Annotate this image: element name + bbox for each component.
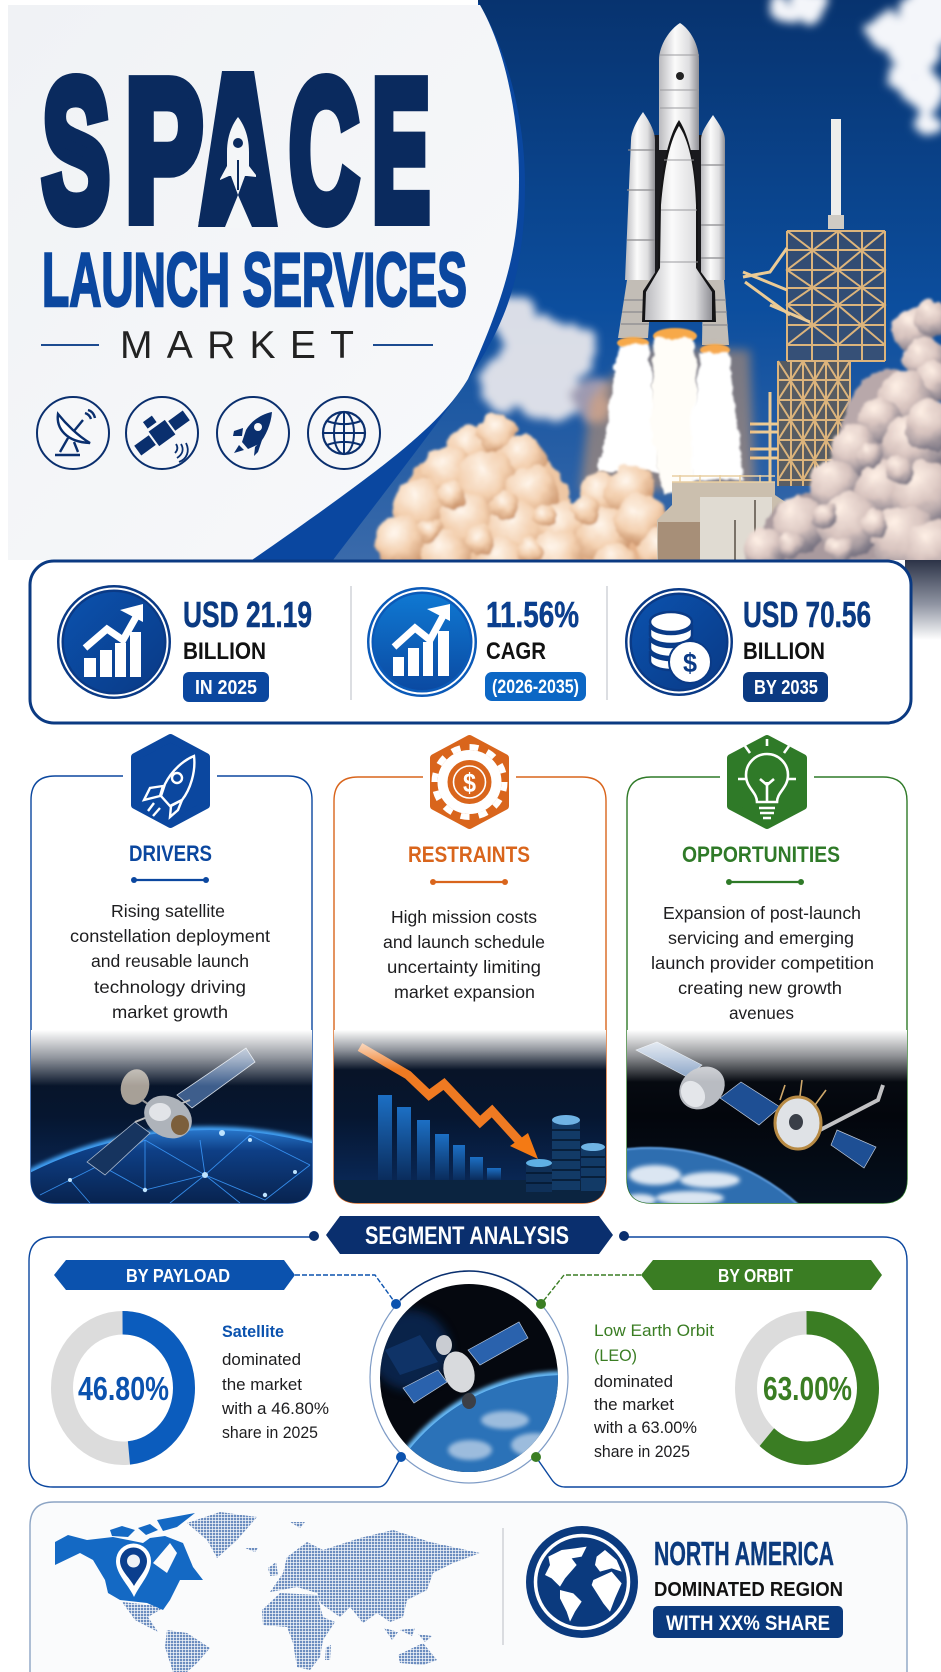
left booster [625, 112, 655, 280]
orbit text: Low Earth Orbit [594, 1321, 714, 1340]
clouds behind rocket [479, 294, 610, 422]
title word SPACE: P [125, 40, 203, 262]
icon: coins [625, 588, 733, 696]
divider rule [430, 879, 508, 885]
region headline: NORTH AMERICA [654, 1535, 834, 1572]
description text: and reusable launch [91, 951, 249, 971]
panel: regional analysis [30, 1502, 907, 1672]
by payload banner [54, 1260, 295, 1290]
icon: rocket [217, 397, 289, 469]
orbit text [593, 1321, 714, 1461]
satellite two [775, 1080, 883, 1168]
image: servicing satellites [627, 1030, 907, 1203]
description text: market growth [112, 1002, 228, 1022]
KPI: USD 70.56 billion by 2035 [625, 588, 871, 702]
description text: market expansion [394, 982, 535, 1002]
description text: Expansion of post-launch [663, 903, 861, 923]
description text [383, 907, 545, 1002]
icon: location pin [116, 1544, 151, 1597]
title word SPACE: A [199, 40, 277, 262]
icon: growth chart blue [367, 587, 477, 697]
panel: opportunities [626, 735, 908, 1204]
donut chart: orbit 63.00% [746, 1323, 868, 1453]
KPI: 11.56% CAGR 2026-2035 [367, 587, 586, 701]
launch smoke right [743, 300, 941, 580]
title word SPACE [42, 40, 430, 262]
launch tower [743, 119, 885, 490]
dotted continents [122, 1512, 480, 1672]
description text: constellation deployment [70, 926, 270, 946]
payload text: the market [222, 1375, 302, 1394]
description text: technology driving [94, 977, 246, 997]
satellite [87, 1048, 255, 1175]
description text [70, 901, 270, 1022]
hero photo: rocket launch [334, 0, 941, 560]
icon: growth chart [57, 585, 171, 699]
share pill [653, 1606, 843, 1638]
coin stacks [526, 1115, 605, 1192]
booster nozzles [618, 280, 652, 338]
payload text: with a 46.80% [221, 1399, 329, 1418]
icon: globe badge [526, 1526, 638, 1638]
MARKET label with rules: MARKET [120, 324, 354, 367]
KPI: USD 21.19 billion in 2025 [57, 585, 312, 702]
satellite one [636, 1042, 780, 1125]
description text: servicing and emerging [668, 928, 854, 948]
share pill: WITH XX% SHARE [666, 1612, 830, 1635]
image: falling chart and coins [334, 1030, 606, 1203]
white title area [8, 5, 519, 560]
rocket cut-out in A [198, 71, 278, 228]
description text: uncertainty limiting [387, 957, 541, 977]
core upper [659, 23, 699, 150]
region subheading: DOMINATED REGION [654, 1579, 843, 1601]
satellite [385, 1322, 528, 1409]
KPI: 11.56% CAGR 2026-2035: CAGR [486, 638, 546, 665]
icon: coins: $ [683, 648, 697, 678]
icon: gear dollar hexagon: $ [463, 768, 476, 798]
panel outline [29, 1237, 907, 1487]
donut chart: payload 46.80% [62, 1323, 184, 1453]
icon: lightbulb hexagon [731, 739, 803, 825]
icon: globe [308, 397, 380, 469]
payload text: dominated [222, 1350, 301, 1369]
orbit text: the market [594, 1395, 674, 1414]
KPI: USD 21.19 billion in 2025: IN 2025 [195, 677, 257, 699]
description text [651, 903, 874, 1023]
KPI: USD 70.56 billion by 2035: BILLION [743, 638, 825, 665]
title block: E [372, 40, 430, 262]
outer white margin [0, 0, 478, 560]
KPI: 11.56% CAGR 2026-2035: (2026-2035) [492, 677, 579, 698]
blue curved band [230, 0, 525, 560]
right edge fade below photo [905, 560, 941, 640]
panel: restraints: RESTRAINTS [408, 842, 530, 867]
KPI panel [30, 561, 911, 723]
icon: gear dollar hexagon [434, 739, 505, 825]
falling bar chart [378, 1095, 501, 1180]
panel: opportunities: OPPORTUNITIES [682, 842, 840, 867]
icon row [37, 397, 380, 469]
divider rule [131, 877, 209, 883]
panel: segment analysis [29, 1216, 907, 1487]
falling orange arrow [360, 1047, 538, 1159]
world map [55, 1512, 480, 1672]
panel: drivers: DRIVERS [129, 841, 212, 866]
payload text: Satellite [222, 1322, 284, 1341]
KPI: USD 70.56 billion by 2035: BY 2035 [754, 677, 818, 699]
panel: restraints [334, 739, 606, 1203]
rocket [618, 23, 729, 345]
description text: avenues [729, 1003, 794, 1023]
image: satellite over earth [31, 1030, 312, 1203]
KPI: 11.56% CAGR 2026-2035: 11.56% [486, 594, 579, 635]
segment analysis banner: SEGMENT ANALYSIS [365, 1222, 569, 1250]
panel: drivers [30, 734, 313, 1204]
divider rule [726, 879, 804, 885]
exhaust flames [580, 338, 755, 494]
engine glows [617, 328, 730, 356]
launch smoke left [372, 410, 667, 560]
description text: and launch schedule [383, 932, 545, 952]
icon: rocket hexagon [135, 738, 206, 824]
by payload banner: BY PAYLOAD [126, 1266, 230, 1286]
orbit text: dominated [594, 1372, 673, 1391]
donut chart: payload 46.80%: 46.80% [78, 1370, 169, 1407]
subtitle LAUNCH SERVICES: LAUNCH SERVICES [42, 238, 467, 323]
payload text [221, 1322, 329, 1442]
orbit text: (LEO) [594, 1346, 637, 1365]
North America highlighted [55, 1513, 203, 1610]
segment analysis banner [309, 1216, 629, 1254]
payload text: share in 2025 [222, 1423, 318, 1442]
central satellite image [369, 1270, 569, 1484]
description text: creating new growth [678, 978, 842, 998]
core lower [642, 120, 716, 322]
icon: satellite [126, 397, 198, 469]
title word SPACE: C [289, 40, 359, 262]
title block [41, 40, 467, 367]
KPI: USD 21.19 billion in 2025: BILLION [183, 638, 266, 665]
KPI: USD 21.19 billion in 2025: USD 21.19 [183, 594, 312, 635]
description text: Rising satellite [111, 901, 225, 921]
launch platform [657, 475, 790, 560]
KPI: USD 70.56 billion by 2035: USD 70.56 [743, 594, 871, 635]
icon: satellite dish [37, 397, 109, 469]
description text: High mission costs [391, 907, 537, 927]
description text: launch provider competition [651, 953, 874, 973]
donut chart: orbit 63.00%: 63.00% [763, 1370, 852, 1407]
earth [627, 1146, 800, 1203]
orbit text: share in 2025 [594, 1442, 690, 1461]
by orbit banner: BY ORBIT [718, 1266, 793, 1286]
clouds top right [766, 0, 941, 134]
by orbit banner [641, 1260, 882, 1290]
title word SPACE: S [42, 40, 110, 262]
right booster [701, 115, 725, 280]
orbit text: with a 63.00% [593, 1418, 697, 1437]
